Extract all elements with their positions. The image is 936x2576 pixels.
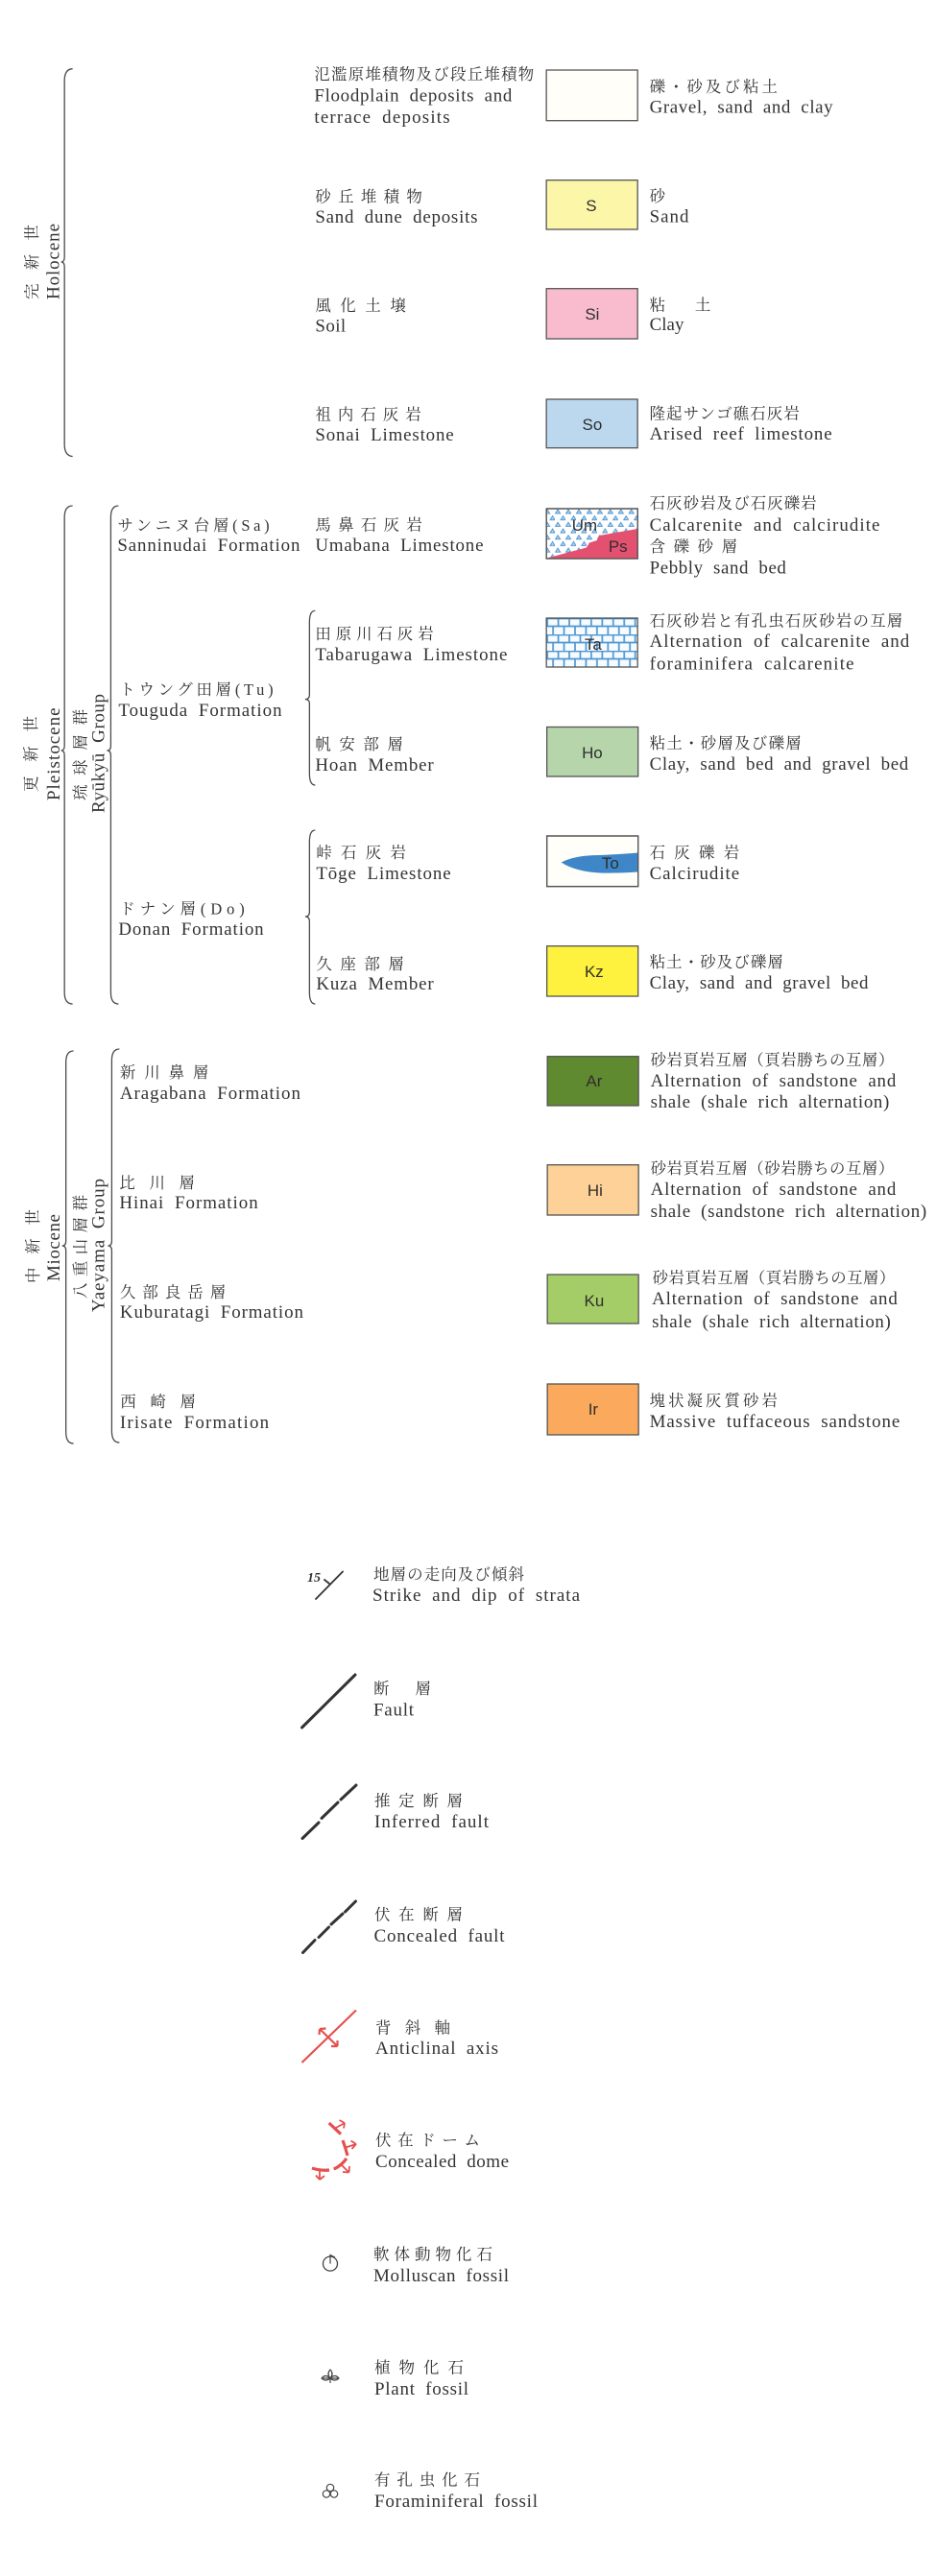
symbol row: concealed dome: Concealed dome [375,2152,509,2172]
row: Hoan member: Ho [582,744,603,762]
symbol row: anticlinal axis: Anticlinal axis [375,2039,498,2059]
panel: Pleistocene [22,494,910,1004]
row: floodplain deposits [314,65,833,128]
symbol row: concealed fault [303,1901,505,1952]
row: Umabana limestone and pebbly sand: Um [572,516,597,535]
symbol row: foraminiferal fossil: Foraminiferal fossil [374,2492,538,2512]
icon: foraminiferal fossil [323,2484,338,2497]
row: Toge limestone: Calcirudite [650,864,739,884]
row: floodplain deposits: 氾濫原堆積物及び段丘堆積物 [314,65,534,83]
formation labels: Touguda Formation [118,701,282,721]
heading: Miocene: Miocene [44,1214,64,1281]
formation labels: トウング田層(Tu) [119,680,274,699]
heading: Pleistocene: 更新世 [22,716,40,792]
formation labels: Donan Formation [118,919,264,940]
row: Aragabana formation: 新川鼻層 [120,1063,208,1082]
row: Kuburatagi formation: Alternation of sandstone and [652,1289,898,1309]
row: Umabana limestone and pebbly sand: 馬鼻石灰岩 [315,515,422,535]
panel: Holocene [23,65,833,456]
row: Umabana limestone and pebbly sand: Calcarenite and calcirudite [650,515,879,536]
row: sand dune deposits [315,180,689,229]
symbol row: strike and dip [307,1565,581,1606]
symbol row: molluscan fossil: Molluscan fossil [373,2266,509,2286]
row: Kuburatagi formation: shale (shale rich alternation) [652,1312,891,1332]
row: floodplain deposits: Floodplain deposits and [314,86,513,107]
row: Hoan member: Hoan Member [315,755,434,775]
symbol row: concealed fault: Concealed fault [374,1926,505,1946]
row: Hinai formation: Hi [588,1181,603,1200]
row: Irisate formation: Massive tuffaceous sandstone [650,1412,900,1432]
heading: Holocene: 完新世 [23,225,41,299]
row: Umabana limestone and pebbly sand: Umabana Limestone [315,536,483,556]
row: Kuburatagi formation [120,1269,898,1332]
row: Hoan member: 粘土・砂層及び礫層 [650,734,802,752]
row: floodplain deposits: terrace deposits [314,107,450,128]
icon: anticlinal axis [301,2010,356,2063]
row: Kuza member: 粘土・砂及び礫層 [650,953,783,971]
symbol row: inferred fault: 推定断層 [374,1792,463,1810]
symbol row: fault: Fault [373,1701,415,1720]
row: soil [315,289,710,339]
row: Umabana limestone and pebbly sand: 石灰砂岩及び石灰礫岩 [650,494,817,513]
row: soil: Si [585,305,599,323]
row: Tabarugawa limestone [315,611,910,675]
row: Hinai formation: 砂岩頁岩互層（砂岩勝ちの互層） [651,1159,894,1178]
row: Kuza member: 久座部層 [316,955,404,973]
row: Aragabana formation: Ar [586,1072,603,1090]
heading: Yaeyama Group: 八重山層群 [72,1195,90,1299]
heading: Pleistocene: Pleistocene [44,708,64,800]
row: Tabarugawa limestone: 田原川石灰岩 [315,625,434,643]
row: Toge limestone: Tōge Limestone [316,864,451,884]
row: soil: 風化土壌 [315,297,406,315]
symbol row: foraminiferal fossil: 有孔虫化石 [374,2471,480,2490]
symbol row: inferred fault: Inferred fault [374,1812,490,1832]
row: Kuburatagi formation: Kuburatagi Formation [120,1302,303,1323]
brace: Holocene [61,69,73,456]
row: soil: 粘 土 [650,297,710,315]
symbol row: plant fossil: Plant fossil [374,2379,468,2399]
row: Hoan member: 帆安部層 [315,735,403,753]
row: Tabarugawa limestone: foraminifera calcarenite [650,654,854,675]
heading: Holocene [23,224,64,299]
icon: strike and dip [307,1571,343,1599]
formation labels [117,516,300,940]
row: sand dune deposits: Sand [650,207,689,227]
symbol row: strike and dip: Strike and dip of strata [372,1586,581,1606]
row: Kuza member: Kuza Member [316,974,434,994]
row: Toge limestone: To [602,854,619,872]
heading: Miocene: 中新世 [24,1209,42,1283]
row: soil: Soil [315,317,346,337]
icon: plant fossil [322,2370,339,2383]
row: Irisate formation: Ir [588,1400,598,1419]
symbol row: concealed dome [312,2120,509,2180]
symbol row: concealed dome: 伏在ドーム [375,2132,480,2150]
row: Tabarugawa limestone: Alternation of calcarenite and [650,632,910,652]
symbol row: molluscan fossil: 軟体動物化石 [373,2246,492,2264]
icon: fault [301,1675,355,1728]
row: Tabarugawa limestone: Ta [585,635,602,654]
row: Tabarugawa limestone: Tabarugawa Limestone [315,645,507,665]
heading: Yaeyama Group [72,1179,108,1312]
row: Toge limestone [316,836,739,887]
row: Hinai formation [119,1159,926,1222]
row: Irisate formation: 塊状凝灰質砂岩 [650,1392,778,1410]
symbol row: fault: 断 層 [373,1680,431,1698]
row: Sonai limestone: 祖内石灰岩 [315,406,421,424]
symbol row: foraminiferal fossil [323,2471,538,2512]
brace: Donan Formation [305,830,315,1004]
icon: concealed dome [312,2120,356,2180]
row: Irisate formation: Irisate Formation [120,1413,270,1433]
row: floodplain deposits: 礫・砂及び粘土 [650,78,778,96]
row: sand dune deposits: 砂丘堆積物 [315,188,422,206]
row: Hinai formation: Hinai Formation [119,1193,258,1213]
symbol row: plant fossil: 植物化石 [374,2359,464,2376]
brace: Pleistocene [61,506,73,1004]
symbol row: strike and dip: 地層の走向及び傾斜 [373,1565,524,1584]
heading: Ryukyu Group: Ryūkyū Group [88,694,108,813]
row: Sonai limestone: Arised reef limestone [650,424,832,444]
brace: Miocene [62,1051,74,1443]
heading: Ryukyu Group: 琉球層群 [72,709,90,800]
legend: geological units [22,65,926,1443]
row: Irisate formation [120,1384,900,1435]
row: Hinai formation: 比川層 [119,1174,195,1192]
legend: map symbols [301,1565,581,2512]
brace: Yaeyama Group [108,1049,119,1443]
row: Umabana limestone and pebbly sand [315,494,879,579]
row: Aragabana formation: shale (shale rich alternation) [651,1092,889,1112]
row: Tabarugawa limestone: 石灰砂岩と有孔虫石灰砂岩の互層 [650,611,902,631]
row: Hinai formation: shale (sandstone rich alternation) [651,1202,926,1222]
row: Kuza member: Clay, sand and gravel bed [650,973,869,993]
icon: inferred fault [302,1785,356,1839]
row: Hinai formation: Alternation of sandstone and [651,1180,897,1200]
row: Sonai limestone [315,399,832,448]
row: Sonai limestone: Sonai Limestone [315,425,454,445]
row: Umabana limestone and pebbly sand: 含礫砂層 [650,537,737,556]
symbol row: fault [301,1675,431,1728]
icon: strike and dip: 15 [307,1571,321,1586]
icon: molluscan fossil [323,2255,338,2271]
brace: Touguda Formation [305,610,315,785]
brace: Ryukyu Group [107,506,118,1004]
heading: Holocene: Holocene [44,224,64,299]
formation labels: サンニヌ台層(Sa) [117,516,270,535]
row: Kuburatagi formation: 砂岩頁岩互層（頁岩勝ちの互層） [653,1269,895,1287]
row: Kuza member [316,946,869,996]
row: Aragabana formation: Aragabana Formation [120,1084,300,1104]
formation labels: Sanninudai Formation [117,536,300,556]
row: Kuza member: Kz [585,963,604,981]
row: Aragabana formation: 砂岩頁岩互層（頁岩勝ちの互層） [651,1051,894,1069]
row: Aragabana formation [120,1051,897,1112]
symbol row: plant fossil [322,2359,468,2399]
heading: Pleistocene [22,708,64,800]
panel: Miocene [24,1049,926,1443]
icon: concealed fault [303,1901,355,1952]
symbol row: inferred fault [302,1785,490,1839]
heading: Ryukyu Group [72,694,108,813]
symbol row: anticlinal axis [301,2010,498,2063]
row: sand dune deposits: 砂 [650,187,666,205]
row: Hoan member: Clay, sand bed and gravel bed [650,754,909,775]
row: Toge limestone: 峠石灰岩 [316,844,406,862]
row: Sonai limestone: 隆起サンゴ礁石灰岩 [650,405,800,423]
symbol row: anticlinal axis: 背斜軸 [375,2019,450,2038]
symbol row: concealed fault: 伏在断層 [374,1906,463,1924]
row: sand dune deposits: Sand dune deposits [315,207,477,227]
row: sand dune deposits: S [586,197,597,215]
heading: Yaeyama Group: Yaeyama Group [88,1179,108,1312]
row: Kuburatagi formation: Ku [585,1292,604,1310]
heading: Miocene [24,1209,64,1283]
row: Aragabana formation: Alternation of sandstone and [651,1071,897,1091]
row: Umabana limestone and pebbly sand: Pebbly sand bed [650,558,786,579]
row: Toge limestone: 石灰礫岩 [650,844,739,862]
row: floodplain deposits: Gravel, sand and clay [650,98,833,118]
row: Hoan member [315,727,909,776]
row: Kuburatagi formation: 久部良岳層 [120,1283,226,1301]
row: Umabana limestone and pebbly sand: Ps [609,537,628,556]
row: Irisate formation: 西崎層 [120,1393,196,1411]
row: Sonai limestone: So [583,416,602,434]
row: soil: Clay [650,315,684,335]
formation labels: ドナン層(Do) [119,899,245,918]
symbol row: molluscan fossil [323,2246,509,2286]
